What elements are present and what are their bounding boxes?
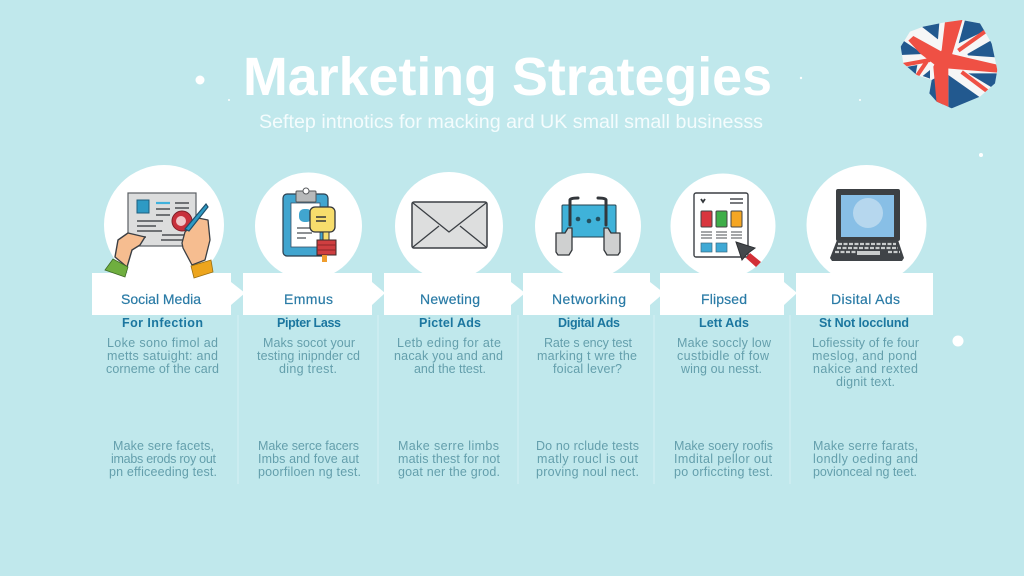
icon circle 4 bbox=[535, 173, 641, 279]
lower body text: Make serre limbs bbox=[398, 439, 499, 453]
column subheadings: For Infection bbox=[122, 316, 203, 330]
icon: clipboard with marker bbox=[283, 188, 336, 262]
column subheadings: St Not locclund bbox=[819, 316, 909, 330]
upper body text: testing inipnder cd bbox=[257, 349, 360, 363]
icon circle 2 bbox=[255, 172, 362, 280]
upper body text: marking t wre the bbox=[537, 349, 637, 363]
upper body text: Letb eding for ate bbox=[397, 336, 501, 350]
icon: UK flag blob bbox=[900, 20, 998, 108]
icon: envelope bbox=[412, 202, 487, 248]
panel: column 6 bbox=[806, 165, 926, 285]
column subheadings bbox=[122, 316, 909, 330]
icon: shirt sleeves over banner bbox=[105, 259, 213, 278]
icon circle 6 bbox=[806, 165, 926, 285]
upper body text: nakice and rexted bbox=[813, 362, 918, 376]
upper body text bbox=[106, 336, 919, 389]
lower body text bbox=[109, 439, 918, 479]
icon: hands holding tablet bbox=[556, 198, 620, 255]
upper body text: ding trest. bbox=[279, 362, 337, 376]
upper body text: Lofiessity of fe four bbox=[812, 336, 919, 350]
lower body text: londly oeding and bbox=[813, 452, 918, 466]
column dividers bbox=[238, 315, 790, 484]
lower body text: povionceal ng teet. bbox=[813, 465, 917, 479]
icon circle 1 bbox=[104, 165, 224, 285]
subtitle: Seftep intnotics for macking ard UK small small businesss bbox=[259, 112, 763, 133]
upper body text: dignit text. bbox=[836, 375, 895, 389]
lower body text: po orficcting test. bbox=[674, 465, 773, 479]
icon circle 5 bbox=[670, 174, 776, 278]
banner labels bbox=[121, 291, 900, 307]
column subheadings: Pipter Lass bbox=[277, 316, 341, 330]
upper body text: Loke sono fimol ad bbox=[107, 336, 218, 350]
upper body text: custbidle of fow bbox=[677, 349, 770, 363]
lower body text: proving noul nect. bbox=[536, 465, 639, 479]
upper body text: metts satuight: and bbox=[107, 349, 218, 363]
banner labels: Networking bbox=[552, 291, 626, 307]
icon: document held in hands bbox=[115, 193, 210, 267]
panel: column 3 bbox=[395, 172, 503, 280]
column subheadings: Digital Ads bbox=[558, 316, 620, 330]
upper body text: wing ou nesst. bbox=[680, 362, 762, 376]
upper body text: and the ttest. bbox=[414, 362, 486, 376]
panel: column 1 social media bbox=[104, 165, 224, 285]
title: Marketing Strategies bbox=[243, 47, 772, 107]
lower body text: matly roucl is out bbox=[537, 452, 639, 466]
lower body text: Make sere facets, bbox=[113, 439, 214, 453]
column subheadings: Lett Ads bbox=[699, 316, 749, 330]
panel: column 2 bbox=[255, 172, 362, 280]
upper body text: corneme of the card bbox=[106, 362, 219, 376]
upper body text: Make soccly low bbox=[677, 336, 772, 350]
icon: web page with cursor bbox=[694, 193, 761, 267]
lower body text: Make serce facers bbox=[258, 439, 359, 453]
panel: column 5 bbox=[670, 174, 776, 278]
column subheadings: Pictel Ads bbox=[419, 316, 481, 330]
panel: column 4 bbox=[535, 173, 641, 279]
lower body text: goat ner the grod. bbox=[398, 465, 500, 479]
lower body text: Make soery roofis bbox=[674, 439, 773, 453]
lower body text: poorfiloen ng test. bbox=[258, 465, 361, 479]
upper body text: nacak you and and bbox=[394, 349, 503, 363]
lower body text: pn efficeeding test. bbox=[109, 465, 217, 479]
lower body text: Imdital pellor out bbox=[674, 452, 773, 466]
upper body text: meslog, and pond bbox=[812, 349, 917, 363]
lower body text: Imbs and fove aut bbox=[258, 452, 360, 466]
icon circle 3 bbox=[395, 172, 503, 280]
upper body text: Maks socot your bbox=[263, 336, 355, 350]
banner labels: Disital Ads bbox=[831, 291, 900, 307]
upper body text: Rate s ency test bbox=[544, 336, 633, 350]
lower body text: matis thest for not bbox=[398, 452, 501, 466]
decorative background dots bbox=[196, 76, 983, 346]
icon: laptop bbox=[830, 189, 904, 261]
banner row bbox=[92, 273, 933, 315]
banner labels: Neweting bbox=[420, 291, 480, 307]
lower body text: Do no rclude tests bbox=[536, 439, 639, 453]
banner labels: Social Media bbox=[121, 291, 201, 307]
banner labels: Flipsed bbox=[701, 291, 747, 307]
upper body text: foical lever? bbox=[553, 362, 622, 376]
banner labels: Emmus bbox=[284, 291, 333, 307]
lower body text: Make serre farats, bbox=[813, 439, 918, 453]
lower body text: imabs erods roy out bbox=[111, 452, 217, 466]
